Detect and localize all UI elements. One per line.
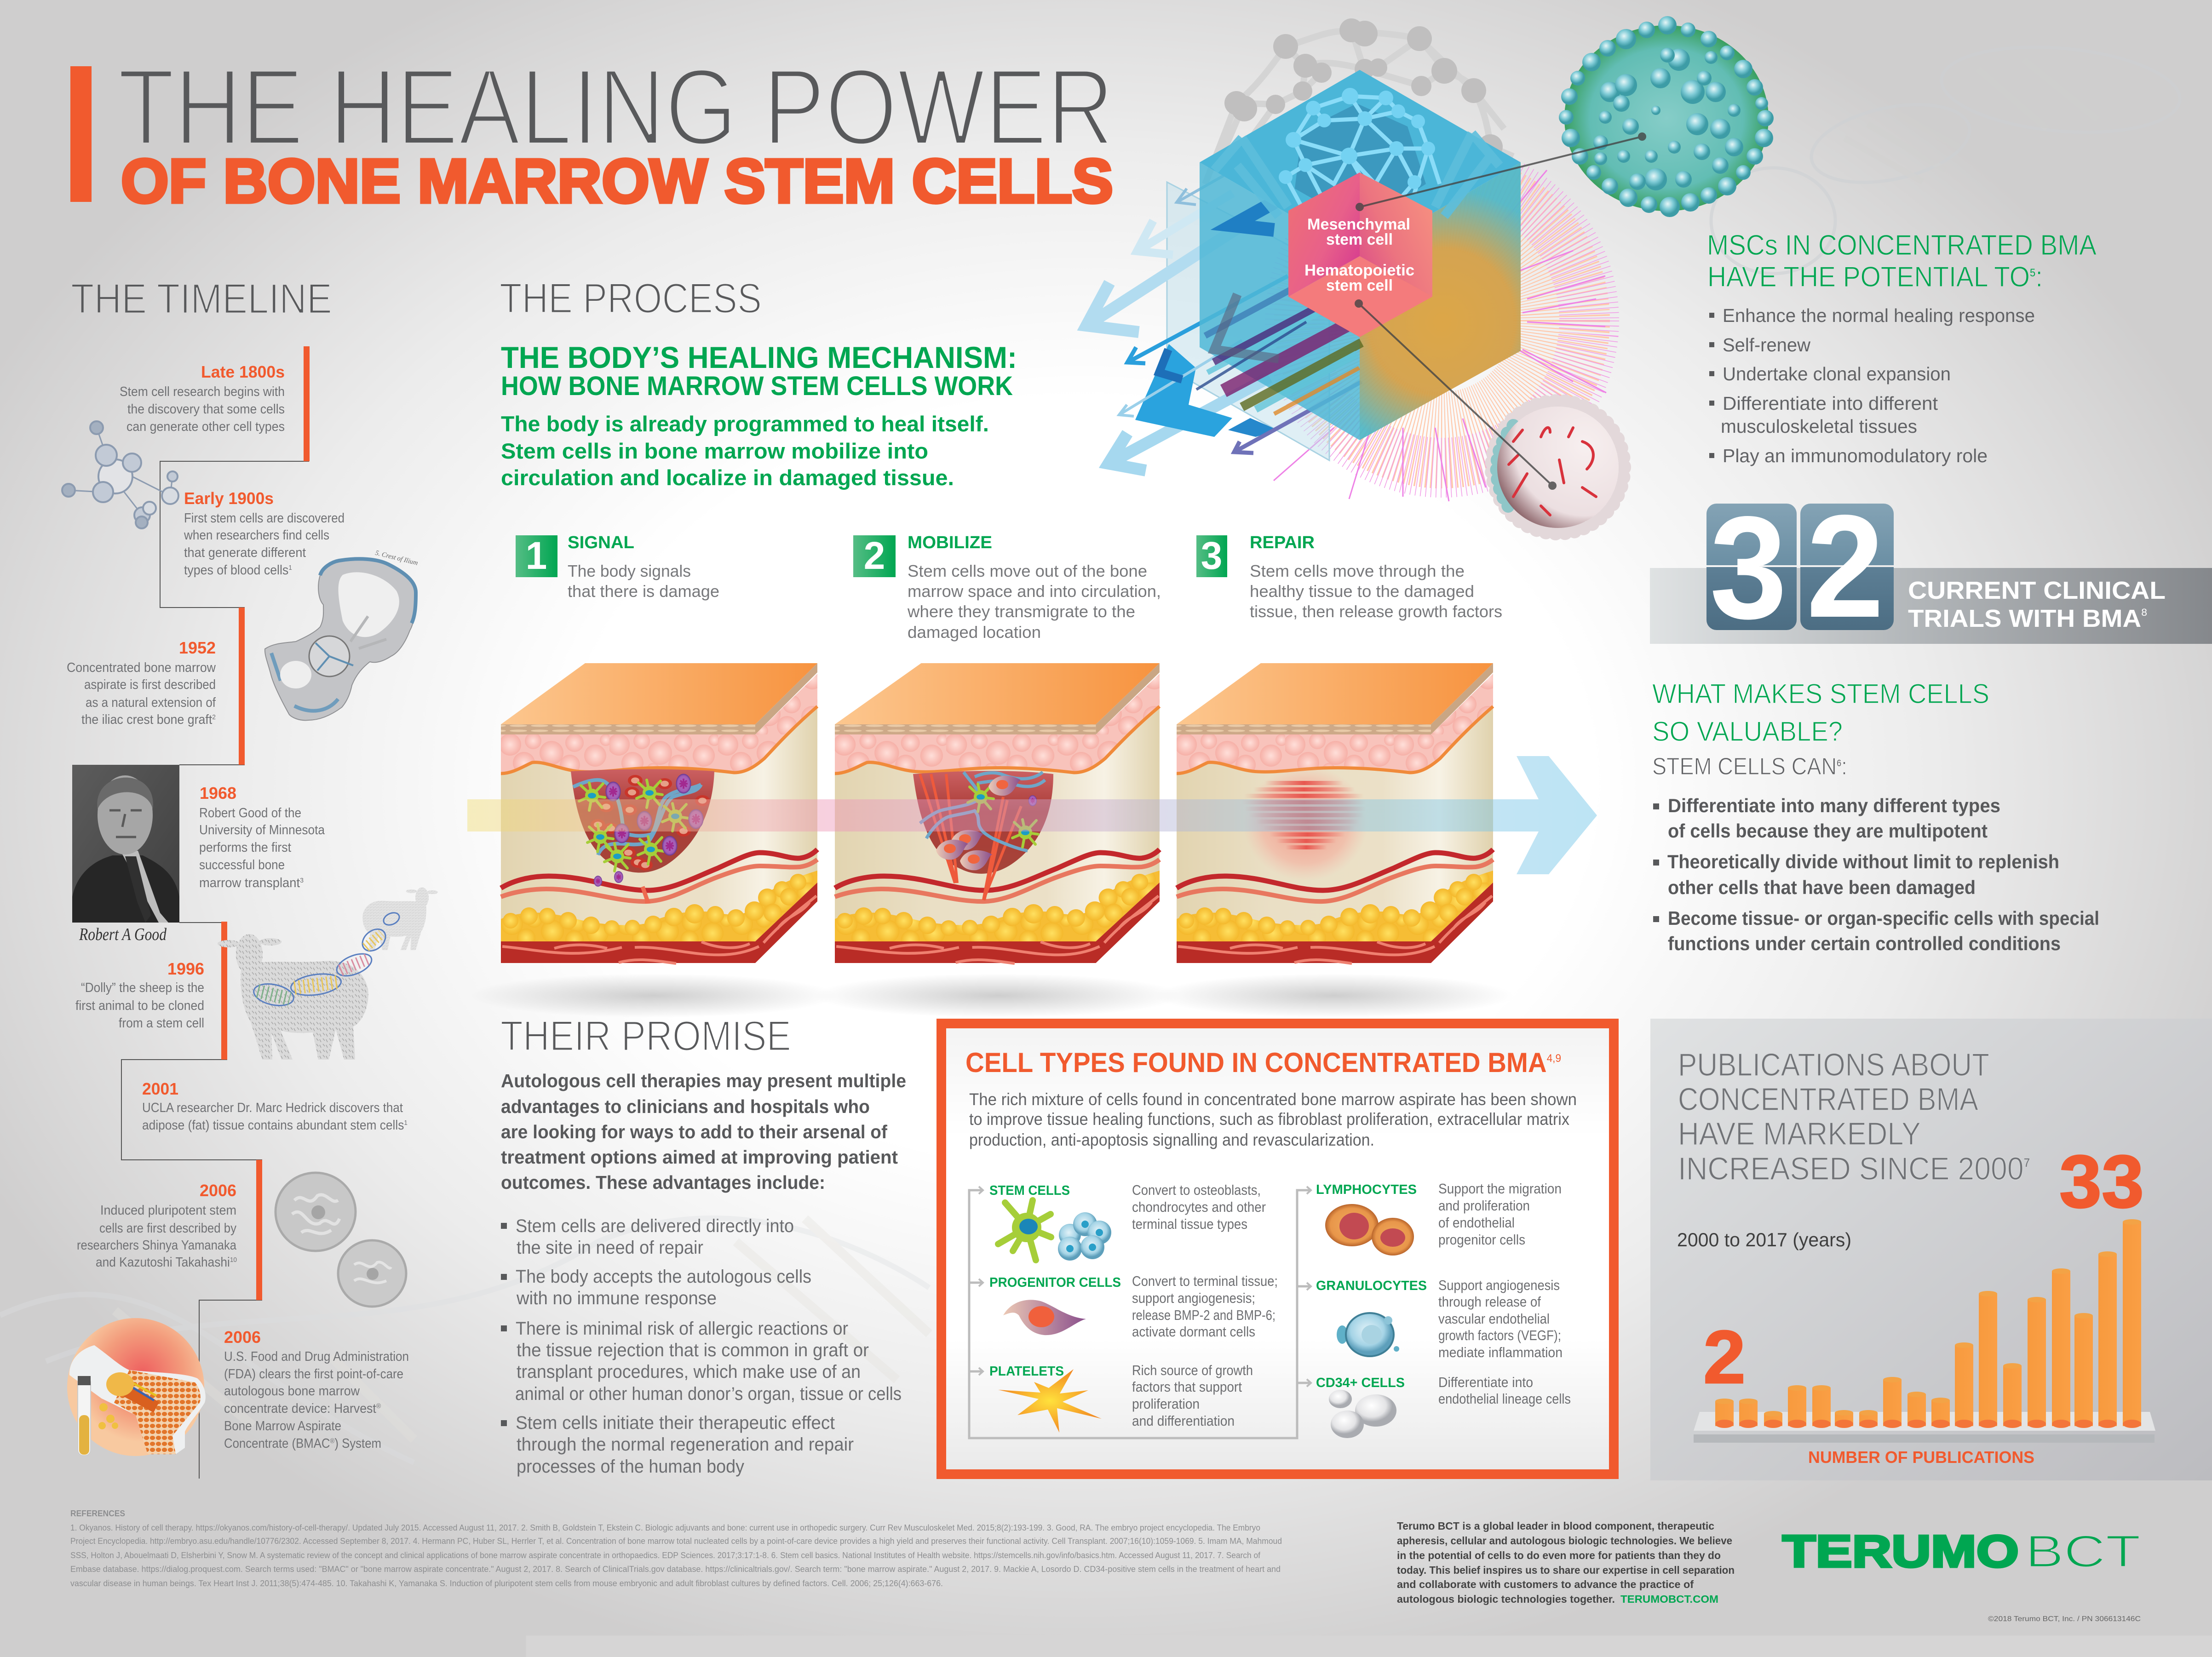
step 3: repair: REPAIR [1250, 533, 1315, 552]
bullet list: stem cells can: other cells that have been damaged [1668, 877, 1976, 898]
event: early 1900s: First stem cells are discovered [184, 511, 345, 526]
event: early 1900s: when researchers find cells [184, 528, 329, 543]
heading: their promise: THEIR PROMISE [500, 1013, 791, 1060]
panel: the timeline [62, 275, 438, 1479]
intro paragraph [501, 1070, 906, 1193]
labels: stem cell types: stem cell [1326, 277, 1393, 294]
event: 2006 FDA: (FDA) clears the first point-of-care [224, 1367, 403, 1382]
heading: the process: THE PROCESS [500, 275, 762, 322]
company description: Terumo BCT is a global leader in blood component, therapeutic [1397, 1520, 1714, 1532]
heading: MSC potential: : [2035, 261, 2043, 293]
event: 2006 induced pluripotent: cells are first described by [99, 1221, 236, 1236]
company description: today. This belief inspires us to share our expertise in cell separation [1397, 1564, 1735, 1576]
entry: granulocytes: vascular endothelial [1438, 1311, 1550, 1327]
intro paragraph: treatment options aimed at improving patient [501, 1147, 898, 1168]
tissue cube 3: repair [1177, 663, 1493, 963]
icon: progenitor cell [1003, 1300, 1086, 1335]
entry: lymphocytes: and proliferation [1438, 1198, 1530, 1214]
tissue cube 2: mobilize [835, 663, 1160, 963]
event: 1968: marrow transplant [199, 876, 306, 890]
panel: the process [467, 275, 1597, 1018]
heading: MSC potential [1707, 229, 2097, 293]
icon: molecule [62, 421, 178, 528]
step 2: mobilize [853, 533, 1161, 642]
references: SSS, Holton J, Abouelmaati D, Elsherbini Y, Snow M. A systematic review of the concept and clinical applications of bone marrow aspirate concentrate in orthopaedics. EDP Sciences. 2017;3:17:1-8. 6. Stem cell basics. National Institutes of Health website. https://stemcells.nih.gov/info/basics.htm. Accessed August 11, 2017. 7. Search of [70, 1551, 1261, 1560]
step 2: mobilize: marrow space and into circulation, [908, 582, 1161, 601]
background DNA faint helix, bottom left [0, 1218, 929, 1462]
event: 1968 [199, 784, 325, 890]
references: REFERENCES [70, 1509, 125, 1518]
hematopoietic stem cell image [1492, 401, 1624, 533]
entry: lymphocytes: progenitor cells [1438, 1232, 1525, 1248]
entry: granulocytes: through release of [1438, 1294, 1541, 1310]
intro paragraph: advantages to clinicians and hospitals who [501, 1096, 870, 1117]
heading: publications: PUBLICATIONS ABOUT [1678, 1047, 1989, 1083]
entry: CD34+ cells: CD34+ CELLS [1316, 1376, 1405, 1390]
entry: platelets: Rich source of growth [1132, 1362, 1253, 1378]
company description: apheresis, cellular and autologous biologic technologies. We believe [1397, 1535, 1732, 1547]
title: OF BONE MARROW STEM CELLS [121, 146, 1113, 216]
event: 2006 FDA: 2006 [224, 1328, 261, 1347]
illustration: grey cells [276, 1173, 406, 1307]
company description: and collaborate with customers to advance the practice of [1397, 1578, 1694, 1590]
step 3: repair: healthy tissue to the damaged [1250, 582, 1474, 601]
entry: lymphocytes: Support the migration [1438, 1181, 1562, 1197]
intro paragraph: to improve tissue healing functions, such as fibroblast proliferation, extracellular matrix [969, 1110, 1569, 1129]
clinical trials text: CURRENT CLINICAL [1908, 577, 2166, 604]
bullet list: advantages: the site in need of repair [517, 1238, 703, 1258]
event: 1996: from a stem cell [119, 1016, 204, 1031]
event: early 1900s: that generate different [184, 545, 306, 560]
event: 2001: 1 [404, 1119, 408, 1127]
event: 2001 [142, 1079, 408, 1133]
hexagon top face with network [1200, 70, 1521, 255]
clinical trials text [1908, 577, 2166, 632]
references: 1. Okyanos. History of cell therapy. https://okyanos.com/history-of-cell-therapy/. Updated July 2015. Accessed August 11, 2017. 2. Smith B, Goldstein T, Ekstein C. Biologic adjuvants and bone: current use in orthopedic surgery. Curr Rev Musculoskelet Med. 2015;8(2):193-199. 3. Good, RA. The embryo project encyclopedia. The Embryo [70, 1523, 1260, 1532]
icon: stem cells [998, 1200, 1111, 1261]
entry: stem cells: chondrocytes and other [1132, 1199, 1266, 1215]
entry: CD34+ cells: Differentiate into [1438, 1374, 1533, 1390]
company description: TERUMOBCT.COM [1620, 1593, 1718, 1605]
number tiles: 3 [1710, 486, 1787, 649]
company description [1397, 1520, 1735, 1605]
illustration: stem cell hexagon [1086, 16, 1774, 533]
tissue cube 1: signal [501, 663, 817, 963]
bullet list: stem cells can [1653, 795, 2099, 954]
illustration: Dolly the sheep with DNA [218, 888, 438, 1060]
number tiles: 2 [1806, 485, 1884, 648]
event: 2006 FDA: autologous bone marrow [224, 1384, 360, 1399]
heading: cell types: CELL TYPES FOUND IN CONCENTRATED BMA [965, 1047, 1584, 1078]
subheading: the body's healing mechanism: THE BODY’S HEALING MECHANISM: [501, 340, 1017, 374]
heading: MSC potential: 5 [2030, 267, 2035, 279]
event: 2006 FDA: Bone Marrow Aspirate [224, 1419, 341, 1433]
bullet list: advantages: transplant procedures, which make use of an [517, 1362, 861, 1382]
event: late 1800s: Late 1800s [201, 362, 285, 381]
number tiles [1706, 485, 1894, 649]
event: 2006 induced pluripotent: 2006 [200, 1181, 236, 1200]
heading: cell types: 4,9 [1547, 1052, 1561, 1065]
blue motion arrows [1086, 176, 1362, 470]
step 2: mobilize: MOBILIZE [908, 533, 992, 552]
bullet list: stem cells can: Theoretically divide without limit to replenish [1667, 851, 2059, 872]
inner pink hexagon [1288, 172, 1432, 337]
event: 1952: 1952 [179, 638, 216, 657]
heading: what makes stem cells so valuable [1652, 678, 1989, 747]
bullet list: advantages: Stem cells initiate their therapeutic effect [516, 1413, 835, 1433]
entry: progenitor cells: PROGENITOR CELLS [989, 1275, 1121, 1290]
bullet list: stem cells can: of cells because they are multipotent [1668, 820, 1988, 842]
event: 2006 FDA: Concentrate (BMAC [224, 1436, 343, 1451]
grey network sphere [1205, 18, 1513, 184]
signature: Robert A Good [79, 925, 167, 944]
heading: MSC potential: MSCs IN CONCENTRATED BMA [1707, 229, 2097, 261]
entry: lymphocytes [1316, 1181, 1562, 1256]
event: 2006 induced pluripotent: and Kazutoshi Takahashi [96, 1255, 244, 1270]
entry: CD34+ cells: endothelial lineage cells [1438, 1391, 1571, 1407]
heading: MSC potential: HAVE THE POTENTIAL TO [1707, 261, 2059, 293]
bullet list: MSC potential: Self-renew [1723, 334, 1810, 355]
event: 1952: as a natural extension of [86, 695, 216, 710]
bullet list: advantages: the tissue rejection that is common in graft or [517, 1340, 869, 1360]
step 1: signal [516, 533, 719, 601]
heading: publications: HAVE MARKEDLY [1678, 1116, 1921, 1152]
event: 1952: the iliac crest bone graft [81, 712, 223, 727]
event: late 1800s: can generate other cell types [126, 419, 285, 434]
references: Project Encyclopedia. http://embryo.asu.edu/handle/10776/2302. Accessed September 8, 2017. 4. Hermann PC, Huber SL, Herrler T, et al. Concentration of bone marrow total nucleated cells by a point-of-care device provides a high yield and preserves their functional activity. Cell Transplant. 2007;16(10):1059-1069. 5. Imam MA, Mahmoud [70, 1537, 1282, 1546]
subheading: the body's healing mechanism: HOW BONE MARROW STEM CELLS WORK [501, 371, 1013, 401]
event: early 1900s: types of blood cells [184, 563, 298, 578]
logo: Terumo BCT [1782, 1526, 2141, 1577]
company description: autologous biologic technologies together. [1397, 1593, 1615, 1605]
event: 2006 induced pluripotent: researchers Shinya Yamanaka [77, 1238, 237, 1253]
step 2: mobilize: where they transmigrate to the [907, 602, 1135, 621]
intro text [501, 412, 989, 490]
references: Embase database. https://dialog.proquest.com. Search terms used: "BMAC" or "bone marrow aspirate concentrate." August 2, 2017. 8. Search of ClinicalTrials.gov database. https://clinicaltrials.gov/. Search term: "bone marrow aspirate." August 2, 2017. 9. Mackie A, Losordo D. CD34-positive stem cells in the treatment of heart and [70, 1565, 1281, 1574]
intro paragraph: Autologous cell therapies may present multiple [501, 1070, 906, 1091]
panel: cell types found in concentrated BMA [941, 1024, 1614, 1474]
references: vascular disease in human beings. Tex Heart Inst J. 2011;38(5):474-485. 10. Takahashi K, Yamanaka S. Induction of pluripotent stem cells from mouse embryonic and adult fibroblast cultures by defined factors. Cell. 2006; 25;126(4):663-676. [70, 1579, 943, 1588]
heading: publications [1678, 1047, 2030, 1187]
photo: Robert Good portrait [72, 765, 179, 923]
bullet list: advantages: through the normal regeneration and repair [517, 1434, 854, 1455]
step 2: mobilize: 2 [864, 534, 885, 577]
bullet list: MSC potential [1709, 305, 2035, 466]
event: 2006 induced pluripotent [77, 1181, 237, 1270]
hexagon left face [1159, 162, 1362, 440]
event: 1968: Robert Good of the [199, 806, 301, 820]
step 1: signal: 1 [526, 534, 547, 577]
intro paragraph: outcomes. These advantages include: [501, 1172, 825, 1193]
timeline path [121, 346, 310, 1479]
labels: stem cell types: Hematopoietic [1304, 262, 1414, 279]
pink starburst rays [1274, 170, 1606, 501]
entry: platelets: proliferation [1132, 1396, 1200, 1412]
icon: granulocyte [1337, 1313, 1399, 1356]
event: 2006 induced pluripotent: Induced pluripotent stem [100, 1203, 236, 1218]
leader lines [1356, 133, 1645, 489]
value: 2: 2 [1703, 1315, 1746, 1399]
step 3: repair: tissue, then release growth factors [1250, 602, 1502, 621]
labels: stem cell types: stem cell [1326, 231, 1393, 248]
step 3: repair: Stem cells move through the [1250, 562, 1465, 580]
event: 2006 induced pluripotent: 10 [230, 1256, 237, 1264]
entry: platelets: factors that support [1132, 1379, 1242, 1395]
icon: lymphocytes [1325, 1204, 1414, 1256]
references [70, 1509, 1282, 1588]
label: years: 2000 to 2017 (years) [1677, 1229, 1851, 1250]
entry: granulocytes [1316, 1277, 1563, 1360]
step 3: repair: 3 [1201, 534, 1222, 577]
event: 1968: 3 [300, 877, 304, 884]
event: 1996: 1996 [167, 959, 204, 978]
entry: granulocytes: mediate inflammation [1438, 1344, 1563, 1360]
bullet list: advantages: with no immune response [516, 1288, 717, 1308]
clinical trials text: TRIALS WITH BMA [1908, 605, 2132, 632]
event: 1952 [67, 638, 216, 727]
event: 1996 [75, 959, 204, 1031]
entry: granulocytes: growth factors (VEGF); [1438, 1327, 1561, 1343]
entry: stem cells: Convert to osteoblasts, [1132, 1182, 1261, 1198]
entry: progenitor cells: activate dormant cells [1132, 1324, 1255, 1340]
heading: what makes stem cells so valuable: SO VALUABLE? [1652, 716, 1843, 747]
bullet list: MSC potential: musculoskeletal tissues [1721, 416, 1917, 437]
event: 1952: aspirate is first described [84, 677, 216, 692]
entry: granulocytes: GRANULOCYTES [1316, 1279, 1427, 1293]
step 2: mobilize: Stem cells move out of the bone [908, 562, 1147, 580]
value: 33: 33 [2059, 1140, 2144, 1223]
entry: lymphocytes: of endothelial [1438, 1215, 1515, 1231]
heading: publications: INCREASED SINCE 2000 [1678, 1151, 2054, 1187]
bullet list: MSC potential: Undertake clonal expansion [1723, 363, 1951, 384]
bullet list: advantages: Stem cells are delivered directly into [516, 1216, 794, 1236]
intro paragraph: production, anti-apoptosis signalling and revascularization. [969, 1130, 1374, 1149]
event: early 1900s [184, 489, 345, 578]
bullet list: MSC potential: Differentiate into different [1723, 393, 1938, 414]
bullet list: MSC potential: Enhance the normal healing response [1723, 305, 2035, 326]
bullet list: MSC potential: Play an immunomodulatory role [1723, 445, 1988, 466]
heading: what makes stem cells so valuable: WHAT MAKES STEM CELLS [1652, 678, 1989, 709]
entry: platelets: PLATELETS [989, 1364, 1064, 1379]
clinical trials text: 8 [2141, 607, 2147, 618]
event: 2006 FDA: ) System [334, 1436, 381, 1451]
event: 2006 FDA: U.S. Food and Drug Administration [224, 1349, 409, 1364]
bullet list: advantages [501, 1216, 902, 1477]
event: early 1900s: 1 [288, 564, 292, 572]
event: 1968: University of Minnesota [199, 823, 325, 837]
company description: in the potential of cells to do even more for patients than they do [1397, 1549, 1721, 1561]
intro paragraph: are looking for ways to add to their arsenal of [501, 1121, 887, 1142]
event: 2006 FDA: ® [330, 1437, 334, 1445]
heading: publications: CONCENTRATED BMA [1678, 1081, 1978, 1117]
event: late 1800s: Stem cell research begins with [120, 384, 285, 399]
arrow: healing progression [467, 756, 1597, 874]
entry: stem cells: STEM CELLS [989, 1183, 1070, 1198]
illustration: hip bone [265, 549, 419, 720]
bullet list: advantages: There is minimal risk of allergic reactions or [516, 1319, 848, 1339]
event: 2001: UCLA researcher Dr. Marc Hedrick discovers that [142, 1101, 403, 1115]
event: 2001: 2001 [142, 1079, 178, 1098]
event: late 1800s [120, 362, 285, 434]
illustration: bone marrow harvest [67, 1318, 206, 1456]
intro text: The body is already programmed to heal itself. [501, 412, 989, 436]
entry: platelets [989, 1362, 1253, 1433]
bullet list: advantages: The body accepts the autologous cells [516, 1267, 811, 1287]
entry: platelets: and differentiation [1132, 1413, 1235, 1429]
entry: progenitor cells: support angiogenesis; [1132, 1290, 1255, 1306]
icon: platelet [998, 1369, 1102, 1433]
entry: stem cells: terminal tissue types [1132, 1216, 1247, 1232]
logo: Terumo BCT: TERUMO [1782, 1526, 2019, 1577]
intro paragraph [969, 1090, 1577, 1149]
subheading: stem cells can: 6 [1837, 758, 1841, 768]
panel: MSC potential [1707, 229, 2097, 466]
title: THE HEALING POWER [118, 46, 1114, 168]
subheading: stem cells can: : [1841, 753, 1847, 780]
logo: Terumo BCT: BCT [2025, 1526, 2141, 1577]
event: 1996: “Dolly” the sheep is the [81, 980, 204, 995]
step 3: repair [1196, 533, 1502, 621]
cube shadows [469, 974, 1513, 1018]
title [70, 46, 1114, 216]
bullet list: advantages: animal or other human donor’s organ, tissue or cells [515, 1384, 902, 1404]
illustration: hip bone: 5. Crest of Ilium [374, 549, 419, 567]
intro text: Stem cells in bone marrow mobilize into [501, 439, 928, 463]
subheading: stem cells can: STEM CELLS CAN [1652, 753, 1858, 780]
intro paragraph: The rich mixture of cells found in concentrated bone marrow aspirate has been shown [969, 1090, 1577, 1109]
event: 2001: adipose (fat) tissue contains abundant stem cells [142, 1118, 431, 1133]
step 1: signal: The body signals [568, 562, 691, 580]
bullet list: stem cells can: functions under certain controlled conditions [1668, 933, 2061, 954]
event: 2006 FDA [224, 1328, 409, 1451]
entry: CD34+ cells [1316, 1374, 1571, 1438]
entry: granulocytes: Support angiogenesis [1438, 1277, 1560, 1293]
event: 2006 FDA: ® [376, 1402, 381, 1410]
axis label: number of publications: NUMBER OF PUBLICATIONS [1808, 1448, 2034, 1467]
icon: CD34+ cells [1329, 1390, 1396, 1438]
event: 1952: Concentrated bone marrow [67, 660, 216, 675]
event: 1968: 1968 [200, 784, 236, 803]
entry: lymphocytes: LYMPHOCYTES [1316, 1182, 1417, 1197]
panel: their promise [500, 1013, 906, 1477]
event: 1952: 2 [212, 713, 216, 721]
intro text: circulation and localize in damaged tissue. [501, 465, 954, 490]
event: early 1900s: Early 1900s [184, 489, 274, 508]
bullet list: stem cells can: Differentiate into many different types [1668, 795, 2000, 816]
entry: stem cells [989, 1182, 1266, 1261]
step 1: signal: SIGNAL [568, 533, 634, 552]
heading: the timeline: THE TIMELINE [71, 275, 332, 322]
event: 1968: performs the first [199, 840, 291, 855]
mesenchymal stem cell image [1559, 16, 1774, 217]
hexagon right face [1360, 162, 1521, 440]
subheading: the body's healing mechanism [501, 340, 1017, 401]
callout: 32 clinical trials [1650, 485, 2212, 649]
bar chart: number of publications [1694, 1219, 2155, 1443]
event: 1968: successful bone [199, 858, 285, 872]
entry: progenitor cells [989, 1273, 1278, 1340]
event: 2006 FDA: concentrate device: Harvest [224, 1401, 389, 1416]
bullet list: advantages: processes of the human body [517, 1456, 744, 1477]
panel: what makes stem cells valuable [1652, 678, 2099, 954]
step 1: signal: that there is damage [568, 582, 719, 601]
event: late 1800s: the discovery that some cells [127, 402, 285, 417]
labels: stem cell types: Mesenchymal [1307, 216, 1410, 233]
copyright: ©2018 Terumo BCT, Inc. / PN 306613146C [1988, 1615, 2141, 1623]
heading: publications: 7 [2024, 1156, 2030, 1170]
bullet list: stem cells can: Become tissue- or organ-specific cells with special [1668, 907, 2099, 929]
background DNA faint helix, top right [1711, 38, 2183, 274]
panel: publications about concentrated BMA [1650, 1019, 2212, 1480]
entry: progenitor cells: Convert to terminal tissue; [1132, 1273, 1278, 1289]
event: 1996: first animal to be cloned [75, 998, 204, 1013]
labels: stem cell types [1304, 216, 1414, 294]
entry: progenitor cells: release BMP-2 and BMP-6; [1132, 1307, 1275, 1323]
connector tree with arrows [969, 1187, 1311, 1438]
step 2: mobilize: damaged location [908, 623, 1041, 642]
